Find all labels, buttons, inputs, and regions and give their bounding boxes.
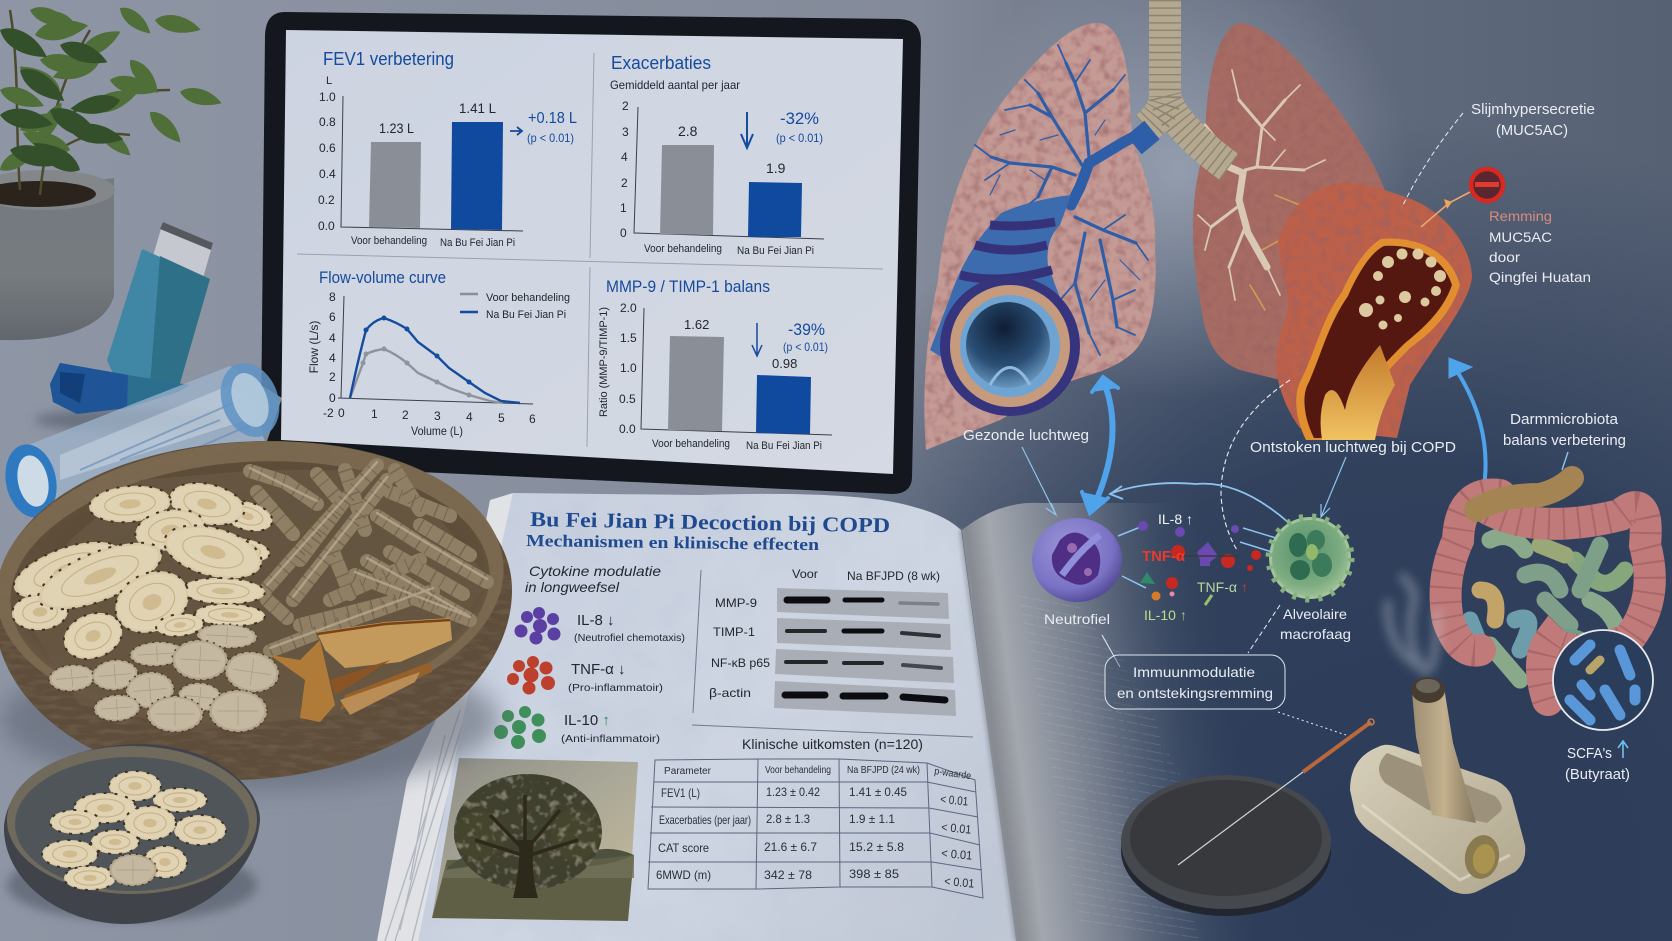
clinical outcomes table: Klinische uitkomsten (n=120) xyxy=(742,736,923,752)
cytokine label: TNF-alpha red: TNF-α xyxy=(1142,548,1186,565)
cytokine: TNF-alpha: (Pro-inflammatoir) xyxy=(568,682,663,694)
label: Gezonde luchtweg xyxy=(963,428,1089,515)
cytokine: IL-10 xyxy=(494,706,660,749)
cytokine label: IL-8 up: IL-8 ↑ xyxy=(1158,511,1193,527)
clinical outcomes table: 21.6 ± 6.7 xyxy=(764,840,817,854)
panel: Exacerbaties: -32% xyxy=(780,109,819,128)
clinical outcomes table: 2.8 ± 1.3 xyxy=(766,812,810,826)
panel: Flow-volume curve: 2 xyxy=(402,408,409,422)
tablet screen xyxy=(281,30,903,474)
clinical outcomes table: CAT score xyxy=(658,841,709,855)
panel: Exacerbaties: (p < 0.01) xyxy=(776,131,823,145)
right COPD lung xyxy=(1193,23,1420,430)
panel: MMP-9 / TIMP-1 balans: (p < 0.01) xyxy=(783,340,828,354)
plant in pot xyxy=(0,2,224,340)
panel: Flow-volume curve: Na Bu Fei Jian Pi xyxy=(486,309,566,321)
panel: Exacerbaties: 2.8 xyxy=(678,123,698,139)
panel: FEV1 verbetering: 0.0 xyxy=(318,219,335,233)
panel: Flow-volume curve: 3 xyxy=(434,409,441,423)
dashed connector from inflamed airway xyxy=(1221,380,1290,550)
panel: Exacerbaties: 2 xyxy=(621,176,628,190)
panel: Flow-volume curve: 0 xyxy=(338,406,345,420)
clinical outcomes table: < 0.01 xyxy=(944,874,975,891)
panel: MMP-9 / TIMP-1 balans: Na Bu Fei Jian Pi xyxy=(746,440,822,452)
panel: Flow-volume curve: 6 xyxy=(529,412,536,426)
panel: Exacerbaties: Voor behandeling xyxy=(644,243,722,255)
tablet body xyxy=(261,12,921,494)
panel: Flow-volume curve: 0 xyxy=(329,391,336,405)
clinical outcomes table: Parameter xyxy=(664,766,712,777)
callout: Slijmhypersecretie xyxy=(1402,102,1595,207)
panel: FEV1 verbetering: (p < 0.01) xyxy=(527,131,574,145)
panel: FEV1 verbetering xyxy=(318,49,577,249)
label: Alveolaire macrofaag xyxy=(1280,606,1351,642)
clinical outcomes table: < 0.01 xyxy=(941,820,972,837)
clinical outcomes table: 15.2 ± 5.8 xyxy=(849,840,904,854)
colon xyxy=(1446,495,1650,700)
clinical outcomes table: < 0.01 xyxy=(940,792,969,808)
label: SCFA's Butyraat: SCFA's xyxy=(1567,746,1612,762)
callout: Slijmhypersecretie: (MUC5AC) xyxy=(1496,123,1568,139)
trachea xyxy=(1134,0,1229,167)
callout: Immuunmodulatie en ontstekingsremming: en ontstekingsremming xyxy=(1117,685,1273,701)
callout: Immuunmodulatie en ontstekingsremming xyxy=(1102,605,1346,735)
cytokine: IL-8: IL-8 ↓ xyxy=(577,612,615,629)
cytokine: IL-8: (Neutrofiel chemotaxis) xyxy=(574,633,685,644)
panel: MMP-9 / TIMP-1 balans: Ratio (MMP-9/TIMP-1) xyxy=(598,307,610,417)
panel: Exacerbaties xyxy=(610,53,824,257)
healthy lung blue bronchial tree xyxy=(975,45,1148,355)
western blot: Voor xyxy=(792,567,818,581)
inflamed airway xyxy=(1276,183,1472,440)
neutrophil cell xyxy=(1032,518,1122,602)
cytokine label: IL-10 up: IL-10 ↑ xyxy=(1144,607,1187,623)
panel: MMP-9 / TIMP-1 balans: 0.0 xyxy=(619,422,636,436)
panel: Flow-volume curve: 4 xyxy=(466,410,473,424)
callout: Remming MUC5AC door Qingfei Huatan: MUC5AC xyxy=(1489,229,1552,245)
arrow: macrophage to neutrophil xyxy=(1110,483,1289,523)
cytokine heading: in longweefsel xyxy=(525,579,620,595)
label: Darmmicrobiota balans verbetering xyxy=(1503,412,1626,470)
clinical outcomes table: 342 ± 78 xyxy=(764,868,812,882)
panel: FEV1 verbetering: 0.2 xyxy=(318,193,335,207)
panel: FEV1 verbetering: 1.0 xyxy=(319,90,336,104)
cytokine: IL-8 xyxy=(514,607,685,644)
inhaler xyxy=(35,222,225,432)
callout: Immuunmodulatie en ontstekingsremming: Immuunmodulatie xyxy=(1133,664,1255,680)
panel: Flow-volume curve: 1 xyxy=(371,407,378,421)
panel: MMP-9 / TIMP-1 balans: 0.5 xyxy=(619,392,636,406)
cytokine molecules xyxy=(1118,521,1276,605)
panel: FEV1 verbetering: L xyxy=(326,75,332,87)
panel: MMP-9 / TIMP-1 balans: -39% xyxy=(788,320,825,339)
clinical outcomes table: Voor behandeling xyxy=(765,765,831,776)
panel: Exacerbaties: 1.9 xyxy=(766,160,786,176)
panel: MMP-9 / TIMP-1 balans xyxy=(598,277,832,452)
panel: FEV1 verbetering: Voor behandeling xyxy=(351,235,427,247)
page stack xyxy=(377,493,513,941)
panel: MMP-9 / TIMP-1 balans: 1.5 xyxy=(620,331,637,345)
cytokine: TNF-alpha: TNF-α ↓ xyxy=(571,661,626,678)
clinical outcomes table: p-waarde xyxy=(934,766,972,782)
panel: Flow-volume curve: Flow-volume curve xyxy=(319,268,446,287)
clinical outcomes table: 1.9 ± 1.1 xyxy=(849,812,895,826)
stomach xyxy=(1476,478,1572,510)
panel: Exacerbaties: Na Bu Fei Jian Pi xyxy=(737,245,814,257)
label: SCFA's Butyraat xyxy=(1565,741,1630,783)
western blot: Na BFJPD (8 wk) xyxy=(847,569,940,583)
healthy airway tube xyxy=(930,195,1075,400)
panel: Flow-volume curve: 6 xyxy=(329,310,336,324)
panel: MMP-9 / TIMP-1 balans: Voor behandeling xyxy=(652,438,730,450)
panel: Exacerbaties: Gemiddeld aantal per jaar xyxy=(610,78,740,92)
small bowl with herb slices xyxy=(4,744,260,924)
herb: root slices xyxy=(7,477,282,732)
large wooden bowl with herbs xyxy=(0,425,513,790)
herb: dried peel xyxy=(270,618,452,722)
intestines xyxy=(1446,478,1650,700)
label: Darmmicrobiota balans verbetering: Darmmicrobiota xyxy=(1510,412,1619,428)
label: Alveolaire macrofaag: Alveolaire xyxy=(1283,606,1347,622)
panel: Flow-volume curve: Flow (L/s) xyxy=(307,321,321,373)
panel: Flow-volume curve: -2 xyxy=(323,406,334,420)
right page xyxy=(962,503,1420,941)
western blot: TIMP-1 xyxy=(713,625,755,639)
healthy airway cross-section xyxy=(940,276,1080,416)
panel: Exacerbaties: 3 xyxy=(622,125,629,139)
mucus plugs xyxy=(1359,248,1446,330)
western blot xyxy=(709,567,956,716)
panel: Flow-volume curve: 4 xyxy=(329,351,336,365)
tablet xyxy=(261,12,921,494)
left page xyxy=(418,493,1016,941)
small intestine xyxy=(1470,537,1625,690)
cytokine label: TNF-alpha up: TNF-α ↑ xyxy=(1197,579,1248,595)
herb: dried roots xyxy=(250,462,487,651)
label: Neutrofiel: Neutrofiel xyxy=(1044,611,1110,627)
panel: Exacerbaties: 2 xyxy=(622,99,629,113)
moxa stick xyxy=(1412,687,1476,823)
callout: Remming MUC5AC door Qingfei Huatan: door xyxy=(1489,249,1520,265)
panel: FEV1 verbetering: 1.23 L xyxy=(379,120,414,136)
clinical outcomes table: 1.41 ± 0.45 xyxy=(849,785,907,799)
panel: FEV1 verbetering: 0.6 xyxy=(319,141,336,155)
smoke xyxy=(1388,575,1437,675)
open book xyxy=(377,493,1420,941)
label: Darmmicrobiota balans verbetering: balans verbetering xyxy=(1503,433,1626,449)
callout: Remming MUC5AC door Qingfei Huatan: Remming xyxy=(1489,208,1552,224)
clinical outcomes table: FEV1 (L) xyxy=(661,786,700,800)
panel: Flow-volume curve: Voor behandeling xyxy=(486,292,570,304)
left healthy lung xyxy=(924,23,1156,450)
cytokine heading xyxy=(525,563,661,595)
clinical outcomes table: Na BFJPD (24 wk) xyxy=(847,765,920,776)
panel: MMP-9 / TIMP-1 balans: 0.98 xyxy=(772,356,797,371)
clinical outcomes table xyxy=(648,736,983,898)
book title xyxy=(526,507,890,554)
panel: FEV1 verbetering: +0.18 L xyxy=(528,110,577,127)
panel: Flow-volume curve: Volume (L) xyxy=(411,424,463,438)
panel: Flow-volume curve xyxy=(307,268,570,438)
clinical outcomes table: 1.23 ± 0.42 xyxy=(766,785,820,799)
callout: Slijmhypersecretie: Slijmhypersecretie xyxy=(1471,102,1595,118)
label: Ontstoken luchtweg bij COPD: Ontstoken luchtweg bij COPD xyxy=(1250,440,1456,456)
clinical outcomes table: < 0.01 xyxy=(941,846,973,863)
tree picture xyxy=(432,758,638,921)
callout: Remming MUC5AC door Qingfei Huatan xyxy=(1489,208,1591,285)
panel: Exacerbaties: 0 xyxy=(620,226,627,240)
western blot: β-actin xyxy=(709,686,751,700)
cytokine: IL-10: (Anti-inflammatoir) xyxy=(561,733,660,745)
icon: inhibition symbol xyxy=(1421,169,1503,227)
book title: Bu Fei Jian Pi Decoction bij COPD xyxy=(530,507,890,537)
panel: FEV1 verbetering: Na Bu Fei Jian Pi xyxy=(440,237,515,249)
panel: Flow-volume curve: 2 xyxy=(329,370,336,384)
stone dish xyxy=(1121,775,1331,916)
callout: Remming MUC5AC door Qingfei Huatan: Qingfei Huatan xyxy=(1489,269,1591,285)
panel: FEV1 verbetering: 0.4 xyxy=(319,167,336,181)
arrow: healthy to inflamed loop xyxy=(1082,377,1118,513)
cytokine: TNF-alpha xyxy=(507,656,663,694)
arrow: gut to lungs xyxy=(1449,358,1486,493)
moxa holder with stick xyxy=(1350,677,1525,894)
panel: Exacerbaties: 1 xyxy=(620,201,627,215)
panel: MMP-9 / TIMP-1 balans: 2.0 xyxy=(620,301,637,315)
panel: MMP-9 / TIMP-1 balans: 1.0 xyxy=(620,361,637,375)
panel: FEV1 verbetering: 0.8 xyxy=(319,115,336,129)
COPD lung pale bronchial tree xyxy=(1198,70,1325,310)
cytokine: IL-10: IL-10 ↑ xyxy=(564,712,610,729)
panel: Flow-volume curve: 5 xyxy=(498,411,505,425)
panel: Flow-volume curve: 4 xyxy=(329,331,336,345)
spacer tube xyxy=(0,355,289,522)
panel: Exacerbaties: 4 xyxy=(621,150,628,164)
panel: MMP-9 / TIMP-1 balans: 1.62 xyxy=(684,317,709,332)
label: Gezonde luchtweg: Gezonde luchtweg xyxy=(963,428,1089,444)
panel: FEV1 verbetering: FEV1 verbetering xyxy=(323,49,454,69)
label: Ontstoken luchtweg bij COPD xyxy=(1250,440,1456,517)
herb underlay xyxy=(20,470,490,730)
panel: MMP-9 / TIMP-1 balans: MMP-9 / TIMP-1 balans xyxy=(606,277,770,296)
panel: FEV1 verbetering: 1.41 L xyxy=(459,100,496,116)
book title: Mechanismen en klinische effecten xyxy=(526,531,820,554)
acupuncture needle xyxy=(1178,719,1374,865)
label: Alveolaire macrofaag: macrofaag xyxy=(1280,626,1351,642)
panel: Flow-volume curve: 8 xyxy=(329,290,336,304)
cytokine heading: Cytokine modulatie xyxy=(529,563,661,579)
clinical outcomes table: Exacerbaties (per jaar) xyxy=(659,813,751,827)
western blot: MMP-9 xyxy=(715,596,757,610)
panel: Exacerbaties: Exacerbaties xyxy=(611,53,711,73)
western blot: NF-κB p65 xyxy=(711,656,770,670)
label: SCFA's Butyraat: (Butyraat) xyxy=(1565,767,1630,783)
alveolar macrophage cell xyxy=(1269,517,1351,599)
clinical outcomes table: 398 ± 85 xyxy=(849,867,899,881)
magnified SCFA circle xyxy=(1553,630,1653,730)
clinical outcomes table: 6MWD (m) xyxy=(656,868,711,882)
